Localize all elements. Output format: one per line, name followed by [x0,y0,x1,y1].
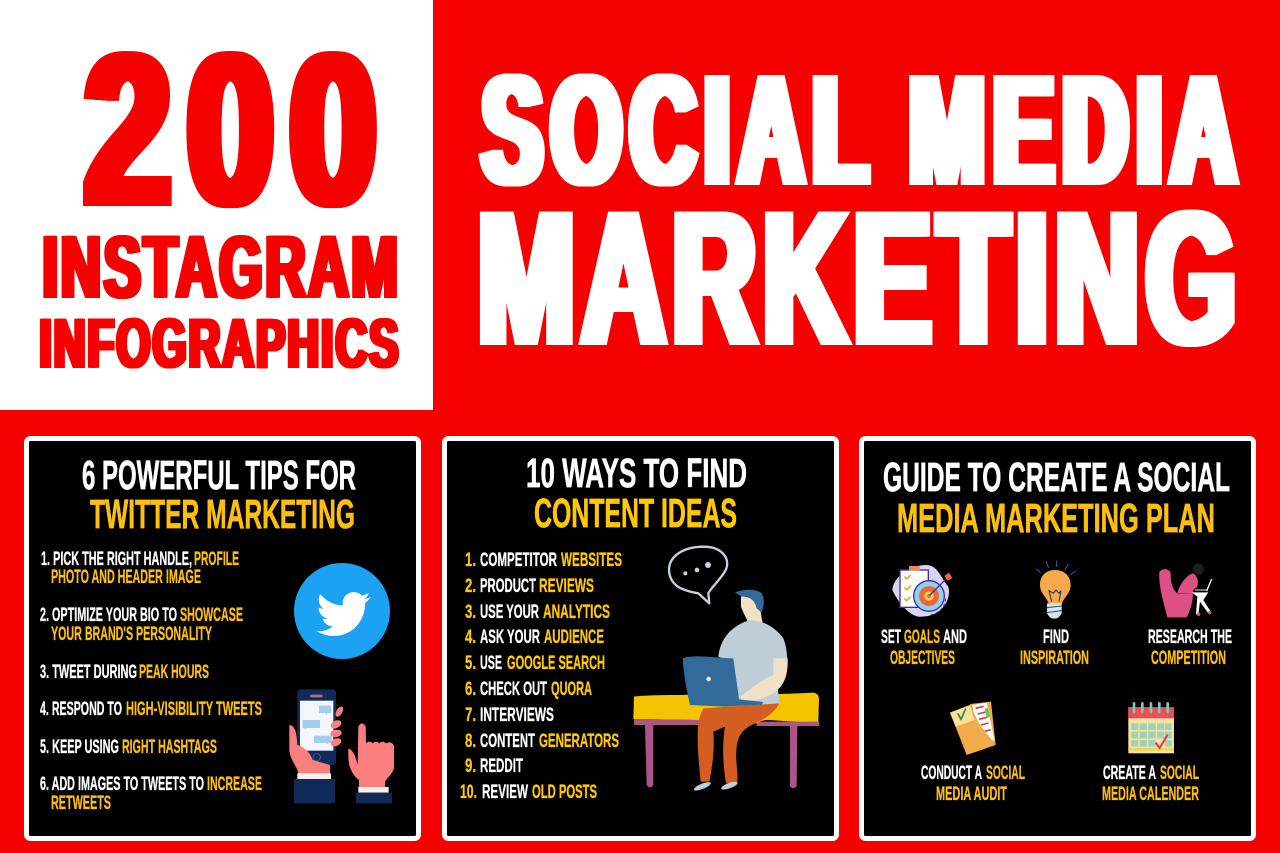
icon: speech bubble [669,547,727,603]
number: 200: 200 [84,11,392,249]
label: research the competition [1148,627,1232,669]
heading: 10 ways to find content ideas: 10 WAYS TO FIND [526,450,747,496]
label: create a social media calender [1102,763,1199,805]
list: ten ways: OLD POSTS [532,782,597,803]
list: six tips: RETWEETS [51,793,111,814]
heading: 6 powerful tips for Twitter marketing: 6 POWERFUL TIPS FOR [82,452,356,498]
heading: Infographics: INFOGRAPHICS [40,305,400,382]
list: six tips: 5. KEEP USING [40,737,119,758]
list: ten ways: ASK YOUR [480,627,540,648]
heading: Instagram: INSTAGRAM [42,219,400,316]
list: six tips: HIGH-VISIBILITY TWEETS [126,699,262,720]
step: create a social media calendar [1102,703,1199,805]
icon: person on armchair with laptop [1159,563,1212,617]
list: ten ways: GENERATORS [539,731,619,752]
list: ten ways: COMPETITOR [480,550,557,571]
label: set goals and objectives: AND [943,627,967,648]
icon: calendar [1128,703,1174,753]
list: six tips: INCREASE [207,774,262,795]
label: find inspiration [1020,627,1089,669]
list: ten ways: PRODUCT [480,576,536,597]
list: ten ways: REVIEW [482,782,528,803]
list: ten ways: QUORA [551,679,592,700]
list: ten ways: 9. [465,756,476,777]
list: six tips: PROFILE [194,549,239,570]
panel: white headline box [0,0,433,410]
list: six tips: YOUR BRAND'S PERSONALITY [51,624,212,645]
list: six tips: 4. RESPOND TO [40,699,122,720]
label: conduct a social media audit: MEDIA AUDIT [936,784,1007,805]
list: ten ways: REDDIT [480,756,523,777]
list: ten ways: CHECK OUT [480,679,547,700]
list: ten ways: REVIEWS [539,576,594,597]
list: ten ways: USE YOUR [480,602,539,623]
list: six tips: SHOWCASE [180,605,243,626]
main title: Social Media Marketing [478,44,1245,383]
label: set goals and objectives [881,627,967,669]
list: ten ways: GOOGLE SEARCH [507,653,605,674]
list: six tips: RIGHT HASHTAGS [122,737,217,758]
list: ten ways: INTERVIEWS [480,705,554,726]
list: ten ways: 3. [465,602,476,623]
list: ten ways: 2. [465,576,476,597]
list: six tips [40,549,262,814]
step: find inspiration [1020,560,1089,669]
list: ten ways: 5. [465,653,476,674]
list: ten ways: CONTENT [480,731,535,752]
heading: 6 powerful tips for Twitter marketing: TWITTER MARKETING [90,491,355,537]
list: ten ways: 8. [465,731,476,752]
label: create a social media calender: SOCIAL [1160,763,1199,784]
list: ten ways: 7. [465,705,476,726]
label: create a social media calender: MEDIA CALENDER [1102,784,1199,805]
label: conduct a social media audit: CONDUCT A [921,763,982,784]
list: ten ways: AUDIENCE [544,627,604,648]
list: six tips: 2. OPTIMIZE YOUR BIO TO [40,605,177,626]
list: ten ways [460,550,622,803]
list: six tips: 1. PICK THE RIGHT HANDLE, [41,549,192,570]
icon: Twitter bird badge [294,563,390,659]
heading: 10 ways to find content ideas: CONTENT IDEAS [534,490,737,536]
list: ten ways: 10. [460,782,477,803]
label: set goals and objectives: OBJECTIVES [890,648,955,669]
icon: hands holding phone [289,689,394,803]
label: set goals and objectives: SET [881,627,901,648]
heading: 10 ways to find content ideas [526,450,747,536]
icon: light bulb [1036,560,1076,619]
list: ten ways: WEBSITES [561,550,622,571]
list: six tips: 3. TWEET DURING [40,662,137,683]
list: six tips: PHOTO AND HEADER IMAGE [51,567,201,588]
label: find inspiration: INSPIRATION [1020,648,1089,669]
list: ten ways: ANALYTICS [543,602,610,623]
step: set goals and objectives [881,565,967,669]
label: find inspiration: FIND [1043,627,1069,648]
panel: content ideas [444,438,836,838]
illustration: man with laptop on bench [633,547,819,792]
list: six tips: PEAK HOURS [139,662,209,683]
label: conduct a social media audit [921,763,1025,805]
list: ten ways: 1. [465,550,476,571]
heading: 6 powerful tips for Twitter marketing [82,452,356,537]
label: conduct a social media audit: SOCIAL [986,763,1025,784]
label: create a social media calender: CREATE A [1103,763,1156,784]
list: ten ways: 4. [465,627,476,648]
list: six tips: 6. ADD IMAGES TO TWEETS TO [40,774,204,795]
icon: folder with checklist [950,702,996,755]
panel: marketing plan guide [862,438,1254,838]
list: ten ways: USE [480,653,502,674]
step: research the competition [1148,563,1232,669]
panel: Twitter marketing tips [26,438,418,838]
label: set goals and objectives: GOALS [904,627,940,648]
list: ten ways: 6. [465,679,476,700]
heading: guide to create a social media marketing plan [883,454,1230,541]
step: conduct a social media audit [921,702,1025,805]
label: research the competition: COMPETITION [1151,648,1226,669]
icon: target and checklist [892,565,952,617]
